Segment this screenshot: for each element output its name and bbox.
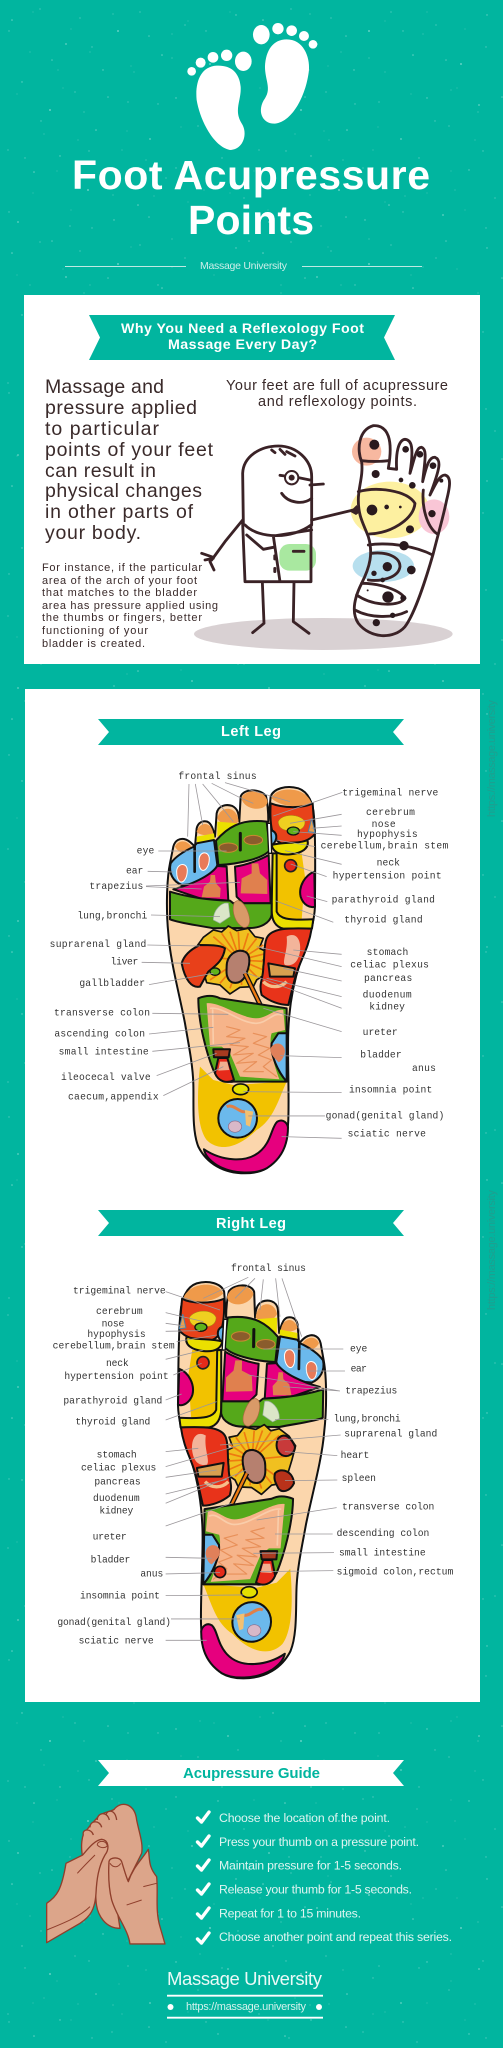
heading ribbon: Why You Need a Reflexology Foot (121, 321, 364, 337)
labels: transverse colon (342, 1502, 434, 1513)
labels: eye (350, 1343, 367, 1354)
panel: foot charts (25, 689, 480, 1702)
labels: nose (102, 1318, 125, 1329)
labels: small intestine (59, 1046, 149, 1057)
labels: cerebellum,brain stem (53, 1340, 175, 1351)
checklist (198, 1811, 452, 1944)
heading: acupressure guide: Acupressure Guide (183, 1765, 320, 1782)
heading: right leg: Right Leg (216, 1216, 286, 1232)
labels: trapezius (89, 881, 143, 892)
labels (50, 771, 448, 1140)
labels: gallbladder (79, 978, 145, 989)
heading: left leg: Left Leg (221, 724, 281, 740)
illustration: doctor and foot chart (194, 426, 453, 650)
labels: ureter (363, 1027, 398, 1038)
footer: brand: https://massage.university (186, 2001, 306, 2013)
detail text: area of the arch of your foot (42, 575, 197, 587)
illustration: hands massaging foot (47, 1804, 165, 1944)
panel: why reflexology (24, 295, 480, 664)
detail text: area has pressure applied using (42, 600, 218, 612)
labels: ear (351, 1363, 367, 1374)
labels: kidney (99, 1506, 134, 1517)
labels: celiac plexus (81, 1463, 156, 1474)
labels: insomnia point (80, 1591, 160, 1602)
labels: lung,bronchi (77, 910, 148, 921)
labels: pancreas (94, 1477, 141, 1488)
chart: left foot (50, 771, 448, 1173)
checklist: Choose another point and repeat this series. (219, 1930, 452, 1944)
labels: small intestine (339, 1547, 426, 1558)
organs: heart, spleen, anus (214, 1436, 295, 1578)
main text (45, 376, 214, 544)
watermark: top: https://massage.university (486, 700, 498, 817)
labels: anus (140, 1569, 163, 1580)
detail text: bladder is created. (42, 638, 145, 650)
labels: kidney (369, 1002, 405, 1013)
side caption: and reflexology points. (258, 394, 417, 410)
organ: liver and gallbladder (182, 945, 225, 987)
checklist: Repeat for 1 to 15 minutes. (219, 1906, 361, 1920)
detail text: For instance, if the particular (42, 562, 202, 574)
labels: transverse colon (54, 1008, 150, 1019)
main text: can result in (45, 460, 156, 482)
labels: celiac plexus (350, 960, 429, 971)
labels: stomach (367, 947, 408, 958)
labels: cerebrum (366, 807, 415, 818)
labels: duodenum (93, 1493, 140, 1504)
chart: right foot (53, 1263, 453, 1678)
main text: pressure applied (45, 397, 197, 419)
subtitle with rules: Massage University (200, 260, 288, 272)
labels: thyroid gland (344, 915, 423, 926)
labels: eye (137, 845, 155, 856)
icon: footprints (187, 23, 317, 150)
labels: cerebellum,brain stem (321, 840, 448, 851)
labels: bladder (360, 1050, 402, 1061)
labels: frontal sinus (178, 771, 257, 782)
labels: spleen (342, 1473, 376, 1484)
labels: gonad(genital gland) (326, 1110, 444, 1121)
main text: to particular (45, 418, 160, 440)
labels: heart (341, 1450, 369, 1461)
labels: duodenum (363, 990, 412, 1001)
labels: frontal sinus (231, 1263, 306, 1274)
title (72, 152, 430, 243)
leader lines (166, 1277, 345, 1640)
labels: insomnia point (349, 1085, 432, 1096)
checklist: Press your thumb on a pressure point. (219, 1835, 419, 1849)
labels: bladder (91, 1555, 130, 1566)
labels: thyroid gland (75, 1416, 150, 1427)
labels: stomach (97, 1450, 137, 1461)
labels: trapezius (345, 1385, 397, 1396)
labels: hypertension point (333, 870, 442, 881)
labels: trigeminal nerve (342, 787, 438, 798)
detail text: functioning of your (42, 625, 148, 637)
heading: right leg (98, 1210, 404, 1236)
labels: ascending colon (54, 1029, 145, 1040)
labels: trigeminal nerve (73, 1286, 166, 1297)
labels: parathyroid gland (63, 1396, 162, 1407)
labels: pancreas (364, 973, 412, 984)
main text: in other parts of (45, 501, 194, 523)
heading ribbon: Massage Every Day? (168, 337, 317, 353)
main text: your body. (45, 522, 141, 544)
watermark: bottom: https://massage.university (486, 1190, 498, 1310)
labels: cerebrum (96, 1306, 143, 1317)
checklist: Maintain pressure for 1-5 seconds. (219, 1858, 402, 1872)
main text: Massage and (45, 376, 164, 398)
labels: suprarenal gland (50, 939, 146, 950)
labels: ileocecal valve (61, 1072, 151, 1083)
labels: ureter (93, 1532, 127, 1543)
detail text: that matches to the bladder (42, 587, 197, 599)
labels: parathyroid gland (332, 895, 435, 906)
labels: nose (372, 819, 396, 830)
heading: acupressure guide (98, 1760, 404, 1786)
checklist: Choose the location of the point. (219, 1811, 390, 1825)
check icons (198, 1812, 209, 1943)
main text: points of your feet (45, 439, 214, 461)
checklist: Release your thumb for 1-5 seconds. (219, 1882, 412, 1896)
labels: neck (106, 1358, 129, 1369)
footer: brand (167, 1968, 323, 2018)
labels: sciatic nerve (79, 1636, 154, 1647)
detail text (42, 562, 218, 650)
title: Foot Acupressure (72, 152, 430, 198)
labels: ear (126, 865, 143, 876)
labels: hypophysis (357, 829, 418, 840)
heading: left leg (98, 719, 404, 745)
main text: physical changes (45, 480, 202, 502)
side caption (226, 378, 448, 410)
heading ribbon (89, 315, 395, 360)
labels: liver (111, 956, 138, 967)
labels: sigmoid colon,rectum (337, 1566, 453, 1577)
leader lines (142, 783, 342, 1138)
labels: neck (377, 858, 400, 869)
labels (53, 1263, 453, 1647)
title: Points (188, 197, 314, 243)
labels: anus (412, 1063, 436, 1074)
detail text: the thumbs or fingers, better (42, 612, 202, 624)
side caption: Your feet are full of acupressure (226, 378, 448, 394)
labels: hypophysis (87, 1329, 146, 1340)
labels: gonad(genital gland) (57, 1617, 171, 1628)
labels: hypertension point (64, 1371, 169, 1382)
labels: descending colon (337, 1528, 429, 1539)
labels: sciatic nerve (348, 1129, 426, 1140)
labels: suprarenal gland (344, 1429, 437, 1440)
footer: brand: Massage University (167, 1968, 323, 1989)
labels: lung,bronchi (334, 1413, 401, 1424)
labels: caecum,appendix (68, 1092, 159, 1103)
